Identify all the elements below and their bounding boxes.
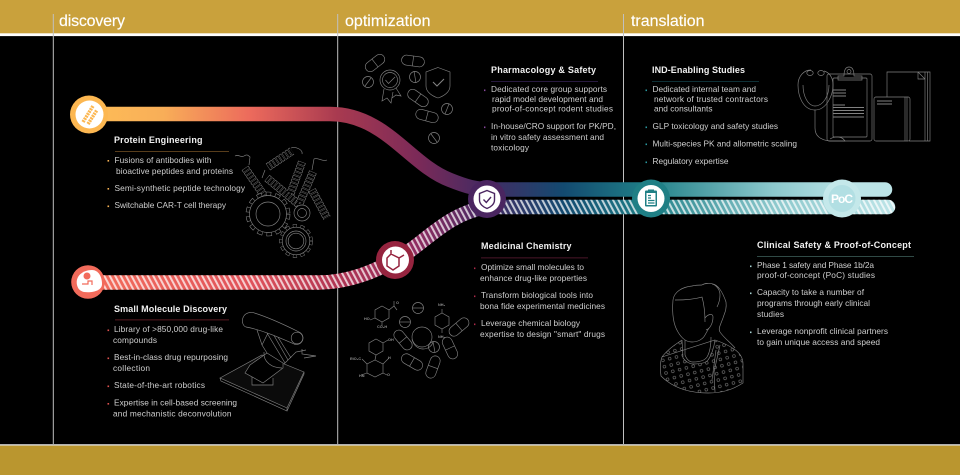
bullet list: State-of-the-art robotics xyxy=(114,380,205,390)
icon: proof-of-concept node xyxy=(823,180,861,218)
illustration: molecules and pills: HO xyxy=(364,317,370,321)
panel: small molecule discovery xyxy=(108,304,237,418)
bullet list: in vitro safety assessment and xyxy=(491,132,604,142)
bullet list: Best-in-class drug repurposing xyxy=(114,352,228,362)
bullet list: Capacity to take a number of xyxy=(757,287,865,297)
bullet list: rapid model development and xyxy=(492,94,603,104)
bullet list: expertise to design "smart" drugs xyxy=(480,329,605,339)
bullet list xyxy=(750,260,888,347)
illustration: patient bust xyxy=(660,283,744,394)
illustration: pills, badge and shield xyxy=(362,52,452,143)
icon: shield node xyxy=(468,180,506,218)
bullet list: Dedicated core group supports xyxy=(491,84,607,94)
illustration: molecules and pills: OH xyxy=(388,338,394,342)
illustration: molecules and pills: NH₂ xyxy=(438,303,445,307)
bullet list: collection xyxy=(113,363,150,373)
illustration: molecules and pills xyxy=(350,301,471,380)
illustration: molecules and pills: NH₂ xyxy=(438,335,445,339)
bullet list: and mechanistic deconvolution xyxy=(113,408,232,418)
illustration: molecules and pills: O xyxy=(387,373,390,377)
heading: translation: translation xyxy=(631,13,704,30)
bullet list: Optimize small molecules to xyxy=(481,262,584,272)
bullet list: bona fide experimental medicines xyxy=(480,301,605,311)
illustration: stethoscope, clipboard and documents xyxy=(798,67,930,141)
bullet list: Switchable CAR-T cell therapy xyxy=(114,200,227,210)
bullet list: Regulatory expertise xyxy=(652,156,729,166)
bullet list: Leverage chemical biology xyxy=(481,318,581,328)
bullet list: Semi-synthetic peptide technology xyxy=(114,183,246,193)
bullet list: Transform biological tools into xyxy=(481,290,593,300)
heading: Small Molecule Discovery xyxy=(114,304,227,314)
bullet list: proof-of-concept (PoC) studies xyxy=(757,270,875,280)
icon: clipboard node xyxy=(632,180,670,218)
heading: Protein Engineering xyxy=(114,135,202,145)
illustration: molecules and pills: CO₂H xyxy=(377,325,387,329)
bullet list: Library of >850,000 drug-like xyxy=(114,324,223,334)
bullet list: to gain unique access and speed xyxy=(757,337,880,347)
illustration: molecules and pills: EtO₂C xyxy=(350,357,361,361)
bullet list xyxy=(474,262,605,339)
panel: protein engineering xyxy=(108,135,246,210)
icon: protein engineering node xyxy=(70,96,108,134)
bullet list xyxy=(108,324,237,418)
icon: proof-of-concept node: PoC xyxy=(831,192,853,206)
illustration: molecules and pills: O xyxy=(396,301,399,305)
bullet list xyxy=(108,155,246,210)
bullet list: Multi-species PK and allometric scaling xyxy=(652,138,797,148)
heading: discovery: discovery xyxy=(59,13,125,30)
illustration: molecules and pills: HN xyxy=(359,374,365,378)
bullet list: Dedicated internal team and xyxy=(652,84,756,94)
heading: Medicinal Chemistry xyxy=(481,241,572,251)
top header band xyxy=(0,0,960,34)
solid pipeline: protein track xyxy=(100,114,885,190)
heading: Pharmacology & Safety xyxy=(491,65,596,75)
bullet list: network of trusted contractors xyxy=(654,94,768,104)
illustration: molecules and pills: H xyxy=(388,356,391,360)
icon: small molecule node xyxy=(71,265,105,299)
bullet list: toxicology xyxy=(491,142,530,152)
bottom footer band xyxy=(0,446,960,475)
bullet list: GLP toxicology and safety studies xyxy=(652,121,778,131)
bullet list: bioactive peptides and proteins xyxy=(116,166,233,176)
bullet list: Fusions of antibodies with xyxy=(114,155,212,165)
heading: optimization: optimization xyxy=(345,13,430,30)
heading: Clinical Safety & Proof-of-Concept xyxy=(757,240,911,250)
bullet list: enhance drug-like properties xyxy=(480,273,587,283)
bullet list: compounds xyxy=(113,335,157,345)
hatched pipeline: small molecule track xyxy=(100,207,888,282)
heading: IND-Enabling Studies xyxy=(652,65,745,75)
bullet list: Phase 1 safety and Phase 1b/2a xyxy=(757,260,874,270)
panel: IND-enabling studies xyxy=(646,65,797,166)
bullet list: Leverage nonprofit clinical partners xyxy=(757,326,888,336)
bullet list: studies xyxy=(757,309,784,319)
panel: pharmacology and safety xyxy=(484,65,616,152)
bullet list xyxy=(484,84,616,152)
illustration: protein and gears xyxy=(235,147,327,256)
bullet list: Expertise in cell-based screening xyxy=(114,398,237,408)
bullet list: proof-of-concept rodent studies xyxy=(492,104,613,114)
bullet list: programs through early clinical xyxy=(757,298,870,308)
bullet list: In-house/CRO support for PK/PD, xyxy=(491,121,616,131)
illustration: robotic arm xyxy=(220,312,316,411)
panel: clinical safety and proof-of-concept xyxy=(750,240,914,347)
bullet list xyxy=(646,84,797,166)
icon: chemistry node xyxy=(376,241,414,279)
panel: medicinal chemistry xyxy=(474,241,605,339)
bullet list: and consultants xyxy=(654,104,712,114)
